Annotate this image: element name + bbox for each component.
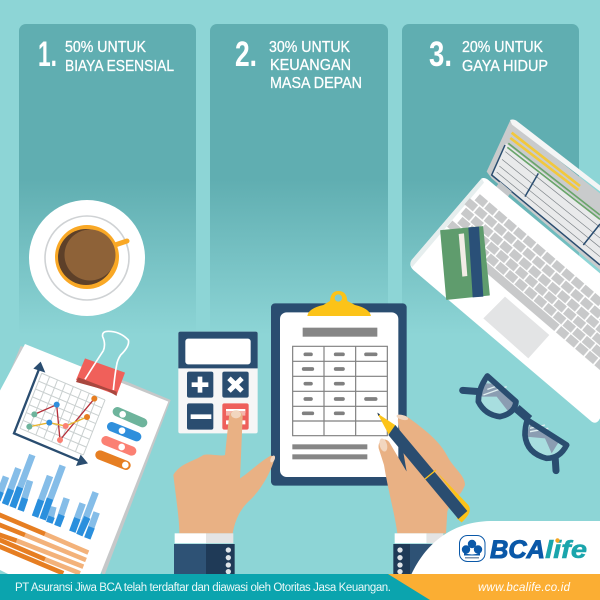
form table [293, 346, 387, 436]
right cuff [395, 533, 443, 543]
form footer lines [292, 444, 367, 459]
document with charts [0, 331, 171, 577]
clipboard paper [280, 312, 398, 477]
heading: 50% untuk biaya esensial [65, 39, 174, 75]
plus button [187, 372, 213, 398]
laptop screen [487, 120, 600, 270]
heading: 20% untuk gaya hidup: 20% UNTUK [462, 39, 544, 56]
logo wordmark life: life [545, 536, 587, 564]
logo background [411, 521, 600, 575]
heading: 50% untuk biaya esensial: BIAYA ESENSIAL [65, 58, 174, 75]
bar charts [0, 455, 97, 538]
number 3: 3. [429, 35, 452, 74]
footer url: www.bcalife.co.id [478, 582, 571, 594]
heading: 50% untuk biaya esensial: 50% UNTUK [65, 39, 147, 56]
logo wordmark BCA: BCA [490, 536, 545, 564]
left arm pressing calculator [173, 410, 276, 575]
laptop [410, 120, 600, 423]
laptop base [410, 178, 600, 423]
number 1: 1. [38, 35, 57, 74]
right arm holding pen [377, 413, 470, 575]
calculator [178, 332, 258, 433]
keyboard [440, 191, 600, 374]
icon: eyeglasses [463, 376, 567, 471]
panel: 50% biaya esensial [19, 24, 196, 336]
heading: 30% untuk keuangan masa depan: KEUANGAN [270, 57, 351, 74]
left sleeve [174, 544, 235, 575]
pen [377, 413, 470, 522]
footer disclaimer: PT Asuransi Jiwa BCA telah terdaftar dan diawasi oleh Otoritas Jasa Keuangan. [15, 582, 391, 594]
logo emblem [460, 536, 485, 562]
credit card [441, 227, 489, 299]
multiply button [222, 372, 249, 398]
minus button [187, 403, 213, 430]
orange text lines [0, 514, 88, 573]
clipboard clip [307, 291, 371, 316]
clipboard [271, 291, 407, 486]
right sleeve [393, 544, 450, 575]
calculator display [185, 339, 251, 364]
binder clip [76, 331, 129, 396]
paper sheet [0, 344, 171, 577]
form title bar [303, 328, 377, 337]
trackpad [483, 297, 549, 358]
equals button [222, 403, 249, 430]
right hand [378, 414, 465, 533]
legend toggles [100, 411, 143, 468]
footer bar [0, 574, 600, 600]
left cuff [175, 533, 233, 543]
heading: 20% untuk gaya hidup: GAYA HIDUP [462, 58, 548, 75]
left hand [173, 410, 276, 533]
heading: 30% untuk keuangan masa depan: 30% UNTUK [269, 39, 351, 56]
panel: 20% gaya hidup [402, 24, 579, 336]
heading: 20% untuk gaya hidup [462, 39, 548, 75]
number 2: 2. [235, 35, 257, 74]
heading: 30% untuk keuangan masa depan [269, 39, 362, 92]
BCA life logo [460, 536, 587, 564]
panel: 30% keuangan masa depan [210, 24, 388, 336]
icon: coffee cup on saucer [29, 200, 145, 316]
heading: 30% untuk keuangan masa depan: MASA DEPAN [270, 75, 362, 92]
logo orange dot [555, 538, 560, 543]
line chart [14, 362, 105, 466]
